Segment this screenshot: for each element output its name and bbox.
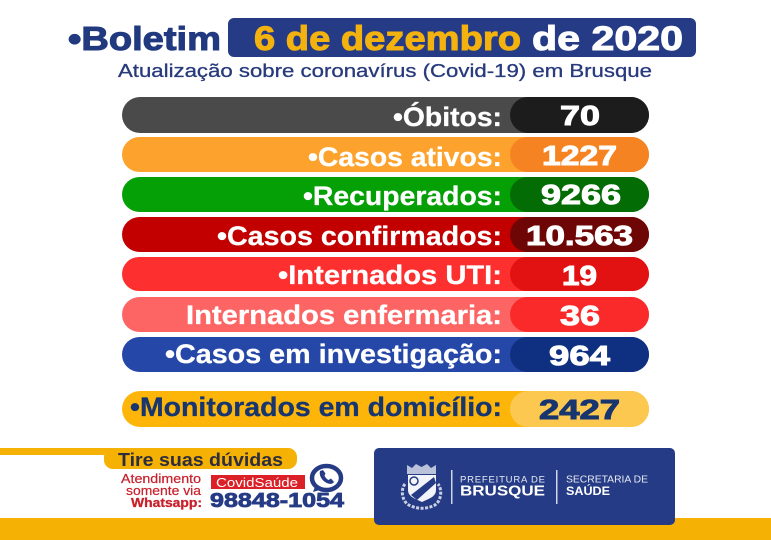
yellow footer band (0, 518, 771, 540)
row: Internados enfermaria: 36 (560, 300, 600, 331)
row: Casos em investigação (122, 337, 649, 372)
row: Casos confirmados (122, 217, 649, 252)
contact note: Atendimento somente via Whatsapp (121, 472, 202, 510)
text: Brusque: BRUSQUE (460, 484, 545, 500)
row: Óbitos: 70 (560, 100, 600, 131)
row: Casos ativos: •Casos ativos: (308, 142, 502, 172)
text: Prefeitura de: PREFEITURA DE (460, 474, 545, 486)
title: Boletim: •Boletim (68, 20, 221, 57)
row: Casos confirmados: 10.563 (526, 220, 633, 251)
row: Monitorados em domicílio (122, 391, 649, 427)
row: Internados enfermaria: Internados enfermaria: (186, 300, 502, 330)
text: Secretaria de: SECRETARIA DE (566, 474, 648, 486)
row: Recuperados: 9266 (541, 179, 621, 210)
row: Internados enfermaria (122, 297, 649, 332)
row: Casos em investigação: 964 (549, 340, 611, 371)
vertical divider (451, 470, 452, 504)
icon: coat of arms (402, 464, 441, 508)
row: Casos em investigação: •Casos em investigação: (165, 339, 502, 369)
contact heading: Tire suas dúvidas (0, 448, 297, 470)
subtitle: Atualização sobre coronavírus (Covid-19) em Brusque (118, 60, 652, 81)
row: Monitorados em domicílio: •Monitorados em domicílio: (130, 392, 502, 422)
contact note: Atendimento somente via Whatsapp: Atendimento (121, 472, 201, 486)
row: Monitorados em domicílio: 2427 (539, 394, 620, 425)
panel: Prefeitura de Brusque (374, 448, 675, 525)
contact note: Atendimento somente via Whatsapp: Whatsapp: (131, 495, 202, 510)
date banner: 6 de dezembro (254, 20, 521, 58)
row: Casos confirmados: •Casos confirmados: (217, 221, 502, 251)
row: Casos ativos (122, 137, 649, 172)
date banner (228, 18, 696, 58)
row: Internados UTI: •Internados UTI: (278, 260, 502, 290)
tag: CovidSaúde: CovidSaúde (216, 475, 298, 490)
text: Saúde: SAÚDE (566, 485, 610, 498)
row: Recuperados: •Recuperados: (303, 181, 502, 211)
phone number: 98848-1054 (210, 490, 345, 512)
row: Internados UTI: 19 (562, 260, 597, 291)
contact note: Atendimento somente via Whatsapp: somente via (126, 484, 201, 498)
row: Óbitos: •Óbitos: (393, 101, 502, 132)
icon: whatsapp (312, 466, 341, 492)
contact heading: Tire suas dúvidas: Tire suas dúvidas (118, 450, 283, 470)
date banner: de 2020 (532, 20, 683, 58)
row: Recuperados (122, 177, 649, 212)
row: Óbitos (122, 97, 649, 133)
row: Internados UTI (122, 257, 649, 291)
vertical divider (556, 470, 558, 504)
row: Casos ativos: 1227 (542, 140, 617, 171)
